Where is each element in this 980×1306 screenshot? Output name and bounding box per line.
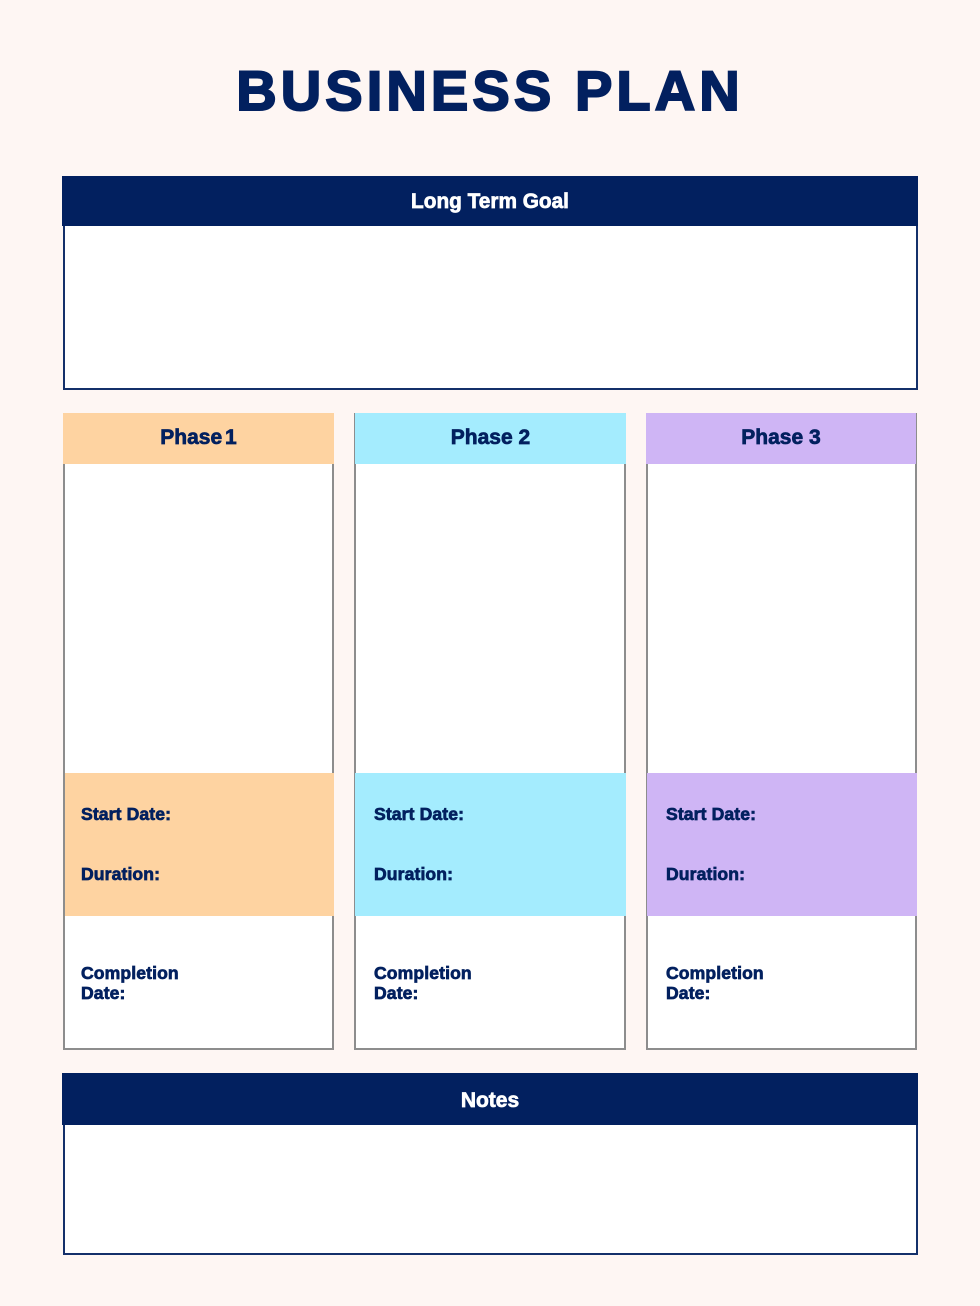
phase 1 duration: Duration: (81, 864, 160, 884)
phase 3 duration: Duration: (666, 864, 745, 884)
panel: notes (62, 1073, 918, 1255)
phase 3 header (646, 413, 916, 464)
goal header (62, 176, 918, 226)
notes header: Notes (461, 1089, 519, 1112)
phase 1 start date: Start Date: (81, 804, 171, 824)
phase 1 completion date (81, 963, 179, 1003)
phase 1 header (63, 413, 334, 464)
phase 3 completion date (666, 963, 764, 1003)
phase 3 start date: Start Date: (666, 804, 756, 824)
panel: long term goal (62, 176, 918, 390)
phase 2 dates band (355, 773, 626, 916)
notes header (62, 1073, 918, 1125)
phase 2 completion date: Completion (374, 963, 472, 983)
phase 3 completion date: Completion (666, 963, 764, 983)
phase 1 header: Phase 1 (160, 426, 237, 449)
panel: phase 3 (646, 413, 917, 1050)
phase 3 completion date: Date: (666, 983, 710, 1003)
phase 1 completion date: Completion (81, 963, 179, 983)
phase 2 completion date (374, 963, 472, 1003)
goal header: Long Term Goal (411, 190, 569, 213)
phase 3 dates band (647, 773, 917, 916)
panel: phase 1 (63, 413, 334, 1050)
phase 3 header: Phase 3 (741, 426, 821, 449)
phase 2 duration: Duration: (374, 864, 453, 884)
phase 2 header: Phase 2 (451, 426, 530, 449)
phase 2 completion date: Date: (374, 983, 418, 1003)
phase 2 start date: Start Date: (374, 804, 464, 824)
goal writing box (63, 215, 918, 390)
phase 2 header (355, 413, 626, 464)
phase 1 dates band (65, 773, 334, 916)
title: BUSINESS PLAN (236, 59, 744, 122)
panel: phase 2 (354, 413, 626, 1050)
phase 1 completion date: Date: (81, 983, 126, 1003)
notes writing box (63, 1113, 918, 1255)
